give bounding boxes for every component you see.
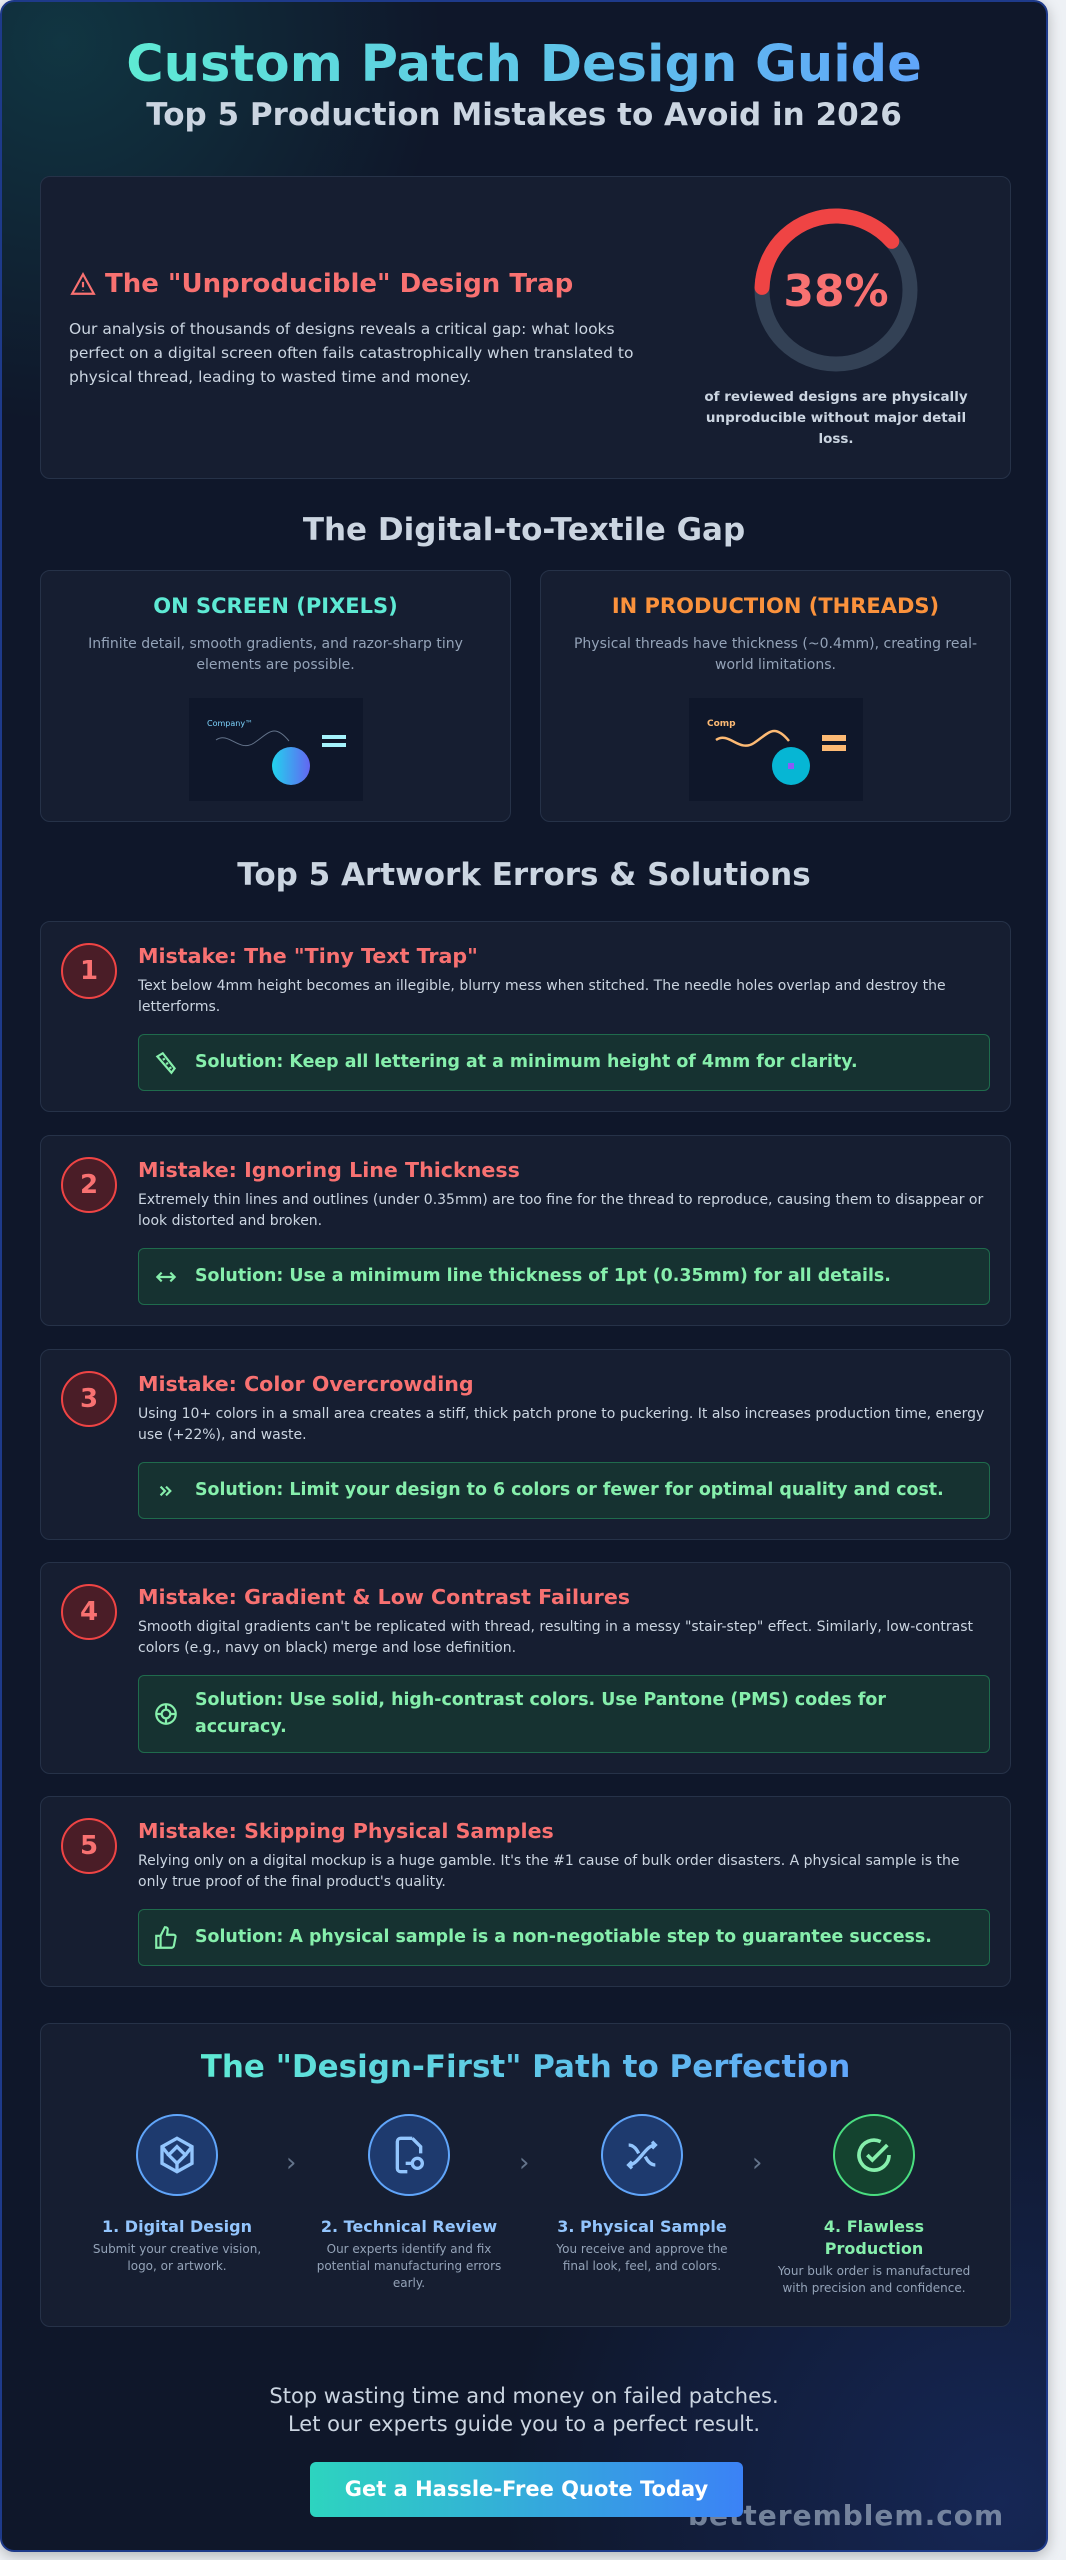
button: quote	[310, 2462, 743, 2517]
icon: design	[136, 2114, 218, 2196]
solution	[138, 1462, 990, 1519]
solution	[138, 1909, 990, 1966]
chart: 38% donut: 38%	[783, 266, 889, 317]
watermark: betteremblem.com	[688, 2499, 1004, 2532]
panel: design-first path	[40, 2023, 1011, 2327]
panel: mistake 3	[40, 1349, 1011, 1540]
step 2: Our experts identify and fix potential manufacturing errors early.	[317, 2242, 501, 2290]
badge 1: 1	[80, 956, 98, 986]
badge 3: 3	[80, 1384, 98, 1414]
panel: mistake 2	[40, 1135, 1011, 1326]
text block: closing: Let our experts guide you to a perfect result.	[288, 2412, 760, 2436]
step 1	[93, 2114, 261, 2273]
button: quote: Get a Hassle-Free Quote Today	[345, 2477, 708, 2501]
heading: IN PRODUCTION (THREADS)	[612, 594, 939, 618]
mistake title: Mistake: Skipping Physical Samples	[138, 1819, 554, 1843]
panel: in production	[540, 570, 1011, 822]
panel: unproducible trap	[40, 176, 1011, 479]
solution: Solution: A physical sample is a non-negotiable step to guarantee success.	[195, 1927, 932, 1947]
illustration: thread logo	[689, 698, 863, 801]
step 3: You receive and approve the final look, feel, and colors.	[556, 2242, 728, 2273]
panel: mistake 1	[40, 921, 1011, 1112]
mistake text: Text below 4mm height becomes an illegible, blurry mess when stitched. The needle holes overlap and destroy the letterforms.	[138, 978, 946, 1015]
panel: mistake 5	[40, 1796, 1011, 1987]
solution	[138, 1675, 990, 1753]
step 1: Submit your creative vision, logo, or artwork.	[93, 2242, 261, 2273]
panel: mistake 4	[40, 1562, 1011, 1774]
panel: on screen	[40, 570, 511, 822]
step 4: 4. Flawless	[824, 2217, 924, 2236]
heading: top 5 errors: Top 5 Artwork Errors & Solutions	[237, 857, 811, 893]
text block: closing: Stop wasting time and money on failed patches.	[269, 2384, 779, 2408]
caption: stat: of reviewed designs are physically unproducible without major detail loss.	[704, 389, 968, 447]
text block: closing	[269, 2384, 779, 2436]
heading: ON SCREEN (PIXELS)	[153, 594, 398, 618]
solution	[138, 1248, 990, 1305]
badge 5: 5	[80, 1831, 98, 1861]
illustration: thread logo: Comp	[707, 719, 736, 729]
step 3	[556, 2114, 728, 2273]
heading: design trap: The "Unproducible" Design Trap	[105, 269, 573, 299]
chart: 38% donut	[754, 208, 918, 372]
mistake text: Smooth digital gradients can't be replicated with thread, resulting in a messy "stair-step" effect. Similarly, low-contrast colors (e.g., navy on black) merge and lose definition.	[138, 1619, 973, 1656]
subtitle: Top 5 Production Mistakes to Avoid in 2026	[146, 97, 902, 133]
step 4: Your bulk order is manufactured with precision and confidence.	[778, 2264, 970, 2295]
step 3: 3. Physical Sample	[557, 2217, 727, 2236]
step 2	[317, 2114, 501, 2290]
mistake title: Mistake: Ignoring Line Thickness	[138, 1158, 520, 1182]
mistake title: Mistake: Color Overcrowding	[138, 1372, 474, 1396]
solution: Solution: Use a minimum line thickness of 1pt (0.35mm) for all details.	[195, 1266, 891, 1286]
arrow: ›	[752, 2148, 762, 2178]
step 2: 2. Technical Review	[321, 2217, 497, 2236]
step 4	[778, 2114, 970, 2295]
mistake text: Relying only on a digital mockup is a huge gamble. It's the #1 cause of bulk order disasters. A physical sample is the only true proof of the final product's quality.	[138, 1853, 959, 1890]
solution: Solution: Keep all lettering at a minimum height of 4mm for clarity.	[195, 1052, 858, 1072]
badge 4	[61, 1584, 117, 1640]
step 4: Production	[825, 2239, 923, 2258]
mistake title: Mistake: Gradient & Low Contrast Failures	[138, 1585, 630, 1609]
badge 1	[61, 943, 117, 999]
mistake text: Using 10+ colors in a small area creates a stiff, thick patch prone to puckering. It also increases production time, energy use (+22%), and waste.	[138, 1406, 984, 1443]
badge 5	[61, 1818, 117, 1874]
illustration: crisp logo	[189, 698, 363, 801]
text: Infinite detail, smooth gradients, and razor-sharp tiny elements are possible.	[88, 636, 463, 673]
heading: digital-to-textile gap: The Digital-to-Textile Gap	[303, 512, 745, 548]
mistake title: Mistake: The "Tiny Text Trap"	[138, 944, 478, 968]
badge 2	[61, 1157, 117, 1213]
solution: Solution: Use solid, high-contrast colors. Use Pantone (PMS) codes for accuracy.	[195, 1690, 886, 1737]
arrow: ›	[286, 2148, 296, 2178]
text: Physical threads have thickness (~0.4mm), creating real-world limitations.	[574, 636, 977, 673]
icon: sample	[601, 2114, 683, 2196]
step 1: 1. Digital Design	[102, 2217, 252, 2236]
icon: review	[368, 2114, 450, 2196]
badge 4: 4	[80, 1597, 98, 1627]
title: Custom Patch Design Guide	[126, 35, 922, 94]
solution	[138, 1034, 990, 1091]
badge 2: 2	[80, 1170, 98, 1200]
heading: The "Design-First" Path to Perfection	[201, 2049, 850, 2085]
solution: Solution: Limit your design to 6 colors or fewer for optimal quality and cost.	[195, 1480, 944, 1500]
text block: analysis: Our analysis of thousands of designs reveals a critical gap: what looks perfect on a digital screen often fails catastrophically when translated to physical thread, leading to wasted time and money.	[69, 320, 633, 386]
mistake text: Extremely thin lines and outlines (under 0.35mm) are too fine for the thread to reproduce, causing them to disappear or look distorted and broken.	[138, 1192, 983, 1229]
icon: check	[833, 2114, 915, 2196]
badge 3	[61, 1371, 117, 1427]
illustration: crisp logo: Company™	[207, 719, 253, 728]
icon: warning	[70, 272, 96, 295]
arrow: ›	[519, 2148, 529, 2178]
